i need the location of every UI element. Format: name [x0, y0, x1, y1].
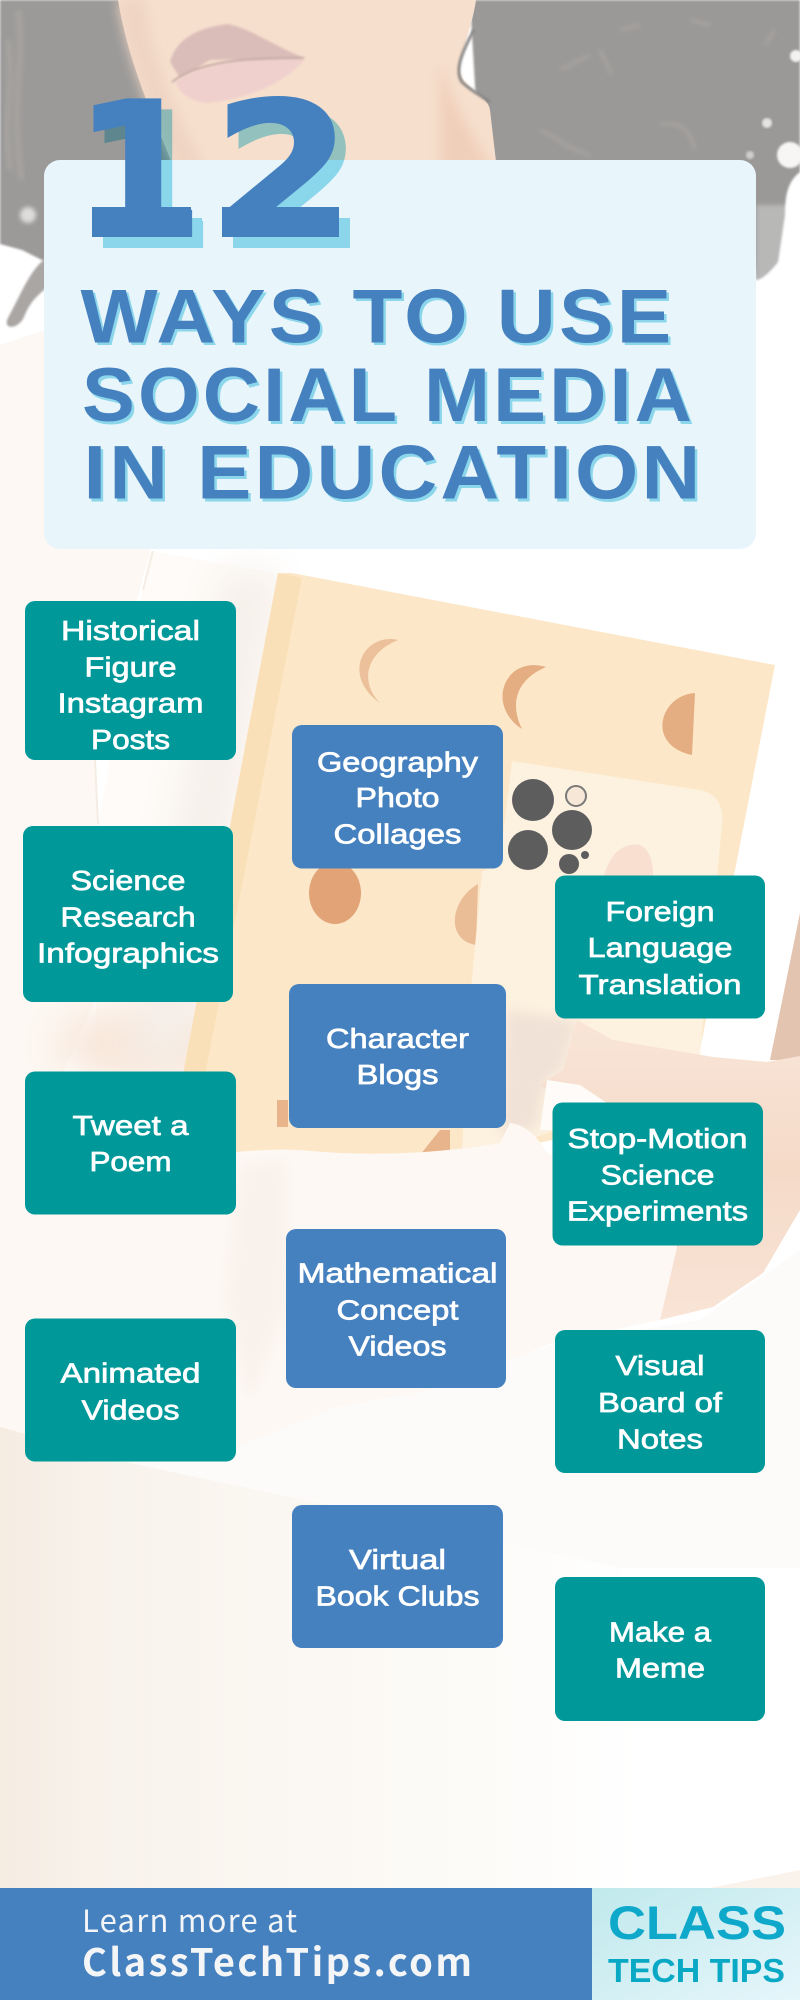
upper sweater shoulder: [0, 330, 150, 1220]
big number 12: 2: [213, 64, 351, 280]
logo: Class Tech Tips: [592, 1888, 800, 2000]
card: Historical Figure Instagram Posts: Instagram: [58, 688, 204, 719]
card: Foreign Language Translation: [555, 876, 765, 1018]
footer banner: [0, 1888, 592, 2000]
face: [118, 0, 497, 170]
card: Character Blogs: [289, 984, 506, 1128]
card: Tweet a Poem: Tweet a: [72, 1110, 189, 1141]
card: Geography Photo Collages: Geography: [317, 747, 478, 778]
card: Make a Meme: Meme: [615, 1653, 705, 1684]
card: Visual Board of Notes: Board of: [598, 1387, 722, 1418]
big number 12: 2: [224, 75, 362, 291]
heading: IN EDUCATION: [86, 434, 706, 518]
card: Stop-Motion Science Experiments: Science: [600, 1160, 714, 1190]
card: Character Blogs: Character: [326, 1023, 469, 1054]
sleeve: [0, 1123, 677, 1463]
hair strands: [540, 20, 775, 155]
card: Character Blogs: Blogs: [356, 1059, 438, 1090]
big number 12: 1: [74, 62, 203, 280]
hair left: [0, 0, 180, 262]
lips: [170, 24, 306, 103]
book: [180, 573, 775, 1160]
hand: [540, 1020, 800, 1320]
footer call to action: Learn more at: [82, 1896, 297, 1941]
card: Animated Videos: Videos: [82, 1394, 180, 1425]
card: Geography Photo Collages: [292, 725, 503, 868]
phone: [462, 761, 722, 1150]
big number 12: 1: [85, 74, 214, 290]
card: Animated Videos: [25, 1318, 236, 1462]
card: Foreign Language Translation: Language: [588, 932, 732, 963]
card: Geography Photo Collages: Photo: [356, 782, 440, 813]
card: Historical Figure Instagram Posts: [25, 601, 236, 760]
logo: Class Tech Tips: TECH TIPS: [608, 1952, 785, 1989]
card: Visual Board of Notes: Visual: [616, 1350, 704, 1381]
card: Foreign Language Translation: Foreign: [606, 896, 714, 927]
card: Historical Figure Instagram Posts: Figure: [84, 652, 176, 682]
card: Make a Meme: [555, 1577, 765, 1721]
paper: [130, 1250, 800, 1568]
lower sweater: [0, 1427, 640, 1888]
card: Virtual Book Clubs: [292, 1505, 503, 1648]
heading: SOCIAL MEDIA: [82, 353, 695, 438]
card: Stop-Motion Science Experiments: [552, 1102, 763, 1246]
title panel: [44, 62, 756, 549]
card: Historical Figure Instagram Posts: Historical: [61, 615, 200, 646]
card: Historical Figure Instagram Posts: Posts: [91, 724, 170, 755]
card: Science Research Infographics: Research: [60, 902, 196, 932]
phone cameras: [508, 779, 592, 874]
card: Make a Meme: Make a: [609, 1616, 711, 1647]
card: Virtual Book Clubs: Book Clubs: [316, 1580, 480, 1612]
card: Stop-Motion Science Experiments: Experiments: [567, 1196, 748, 1227]
card: Animated Videos: Animated: [60, 1358, 200, 1388]
card: Visual Board of Notes: [555, 1330, 765, 1473]
card: Science Research Infographics: Science: [70, 865, 186, 896]
heading: WAYS TO USE: [83, 277, 677, 362]
heading: WAYS TO USE: [80, 274, 674, 360]
card: Geography Photo Collages: Collages: [334, 818, 462, 850]
arm behind: [770, 913, 800, 1060]
card: Mathematical Concept Videos: [286, 1229, 506, 1388]
moons: [277, 639, 695, 1155]
card: Visual Board of Notes: Notes: [617, 1424, 703, 1455]
heading: [80, 274, 706, 518]
heading: SOCIAL MEDIA: [84, 356, 698, 441]
card: Tweet a Poem: [25, 1072, 236, 1214]
card: Stop-Motion Science Experiments: Stop-Motion: [568, 1123, 748, 1154]
finger: [603, 845, 653, 890]
curl on cheek: [459, 30, 490, 102]
card: Mathematical Concept Videos: Concept: [336, 1294, 459, 1325]
footer call to action: ClassTechTips.com: [82, 1932, 472, 1987]
hair right: [470, 0, 800, 280]
heading: IN EDUCATION: [84, 430, 704, 516]
footer call to action: [82, 1896, 472, 1987]
card: Virtual Book Clubs: Virtual: [349, 1544, 446, 1575]
card: Science Research Infographics: [23, 826, 233, 1002]
card: Mathematical Concept Videos: Videos: [348, 1331, 446, 1362]
card: Science Research Infographics: Infographics: [37, 938, 219, 969]
logo: Class Tech Tips: CLASS: [608, 1896, 786, 1949]
card: Tweet a Poem: Poem: [90, 1146, 172, 1177]
card: Foreign Language Translation: Translation: [578, 969, 742, 1000]
big number 12: [74, 62, 362, 291]
card: Mathematical Concept Videos: Mathematical: [298, 1258, 498, 1288]
